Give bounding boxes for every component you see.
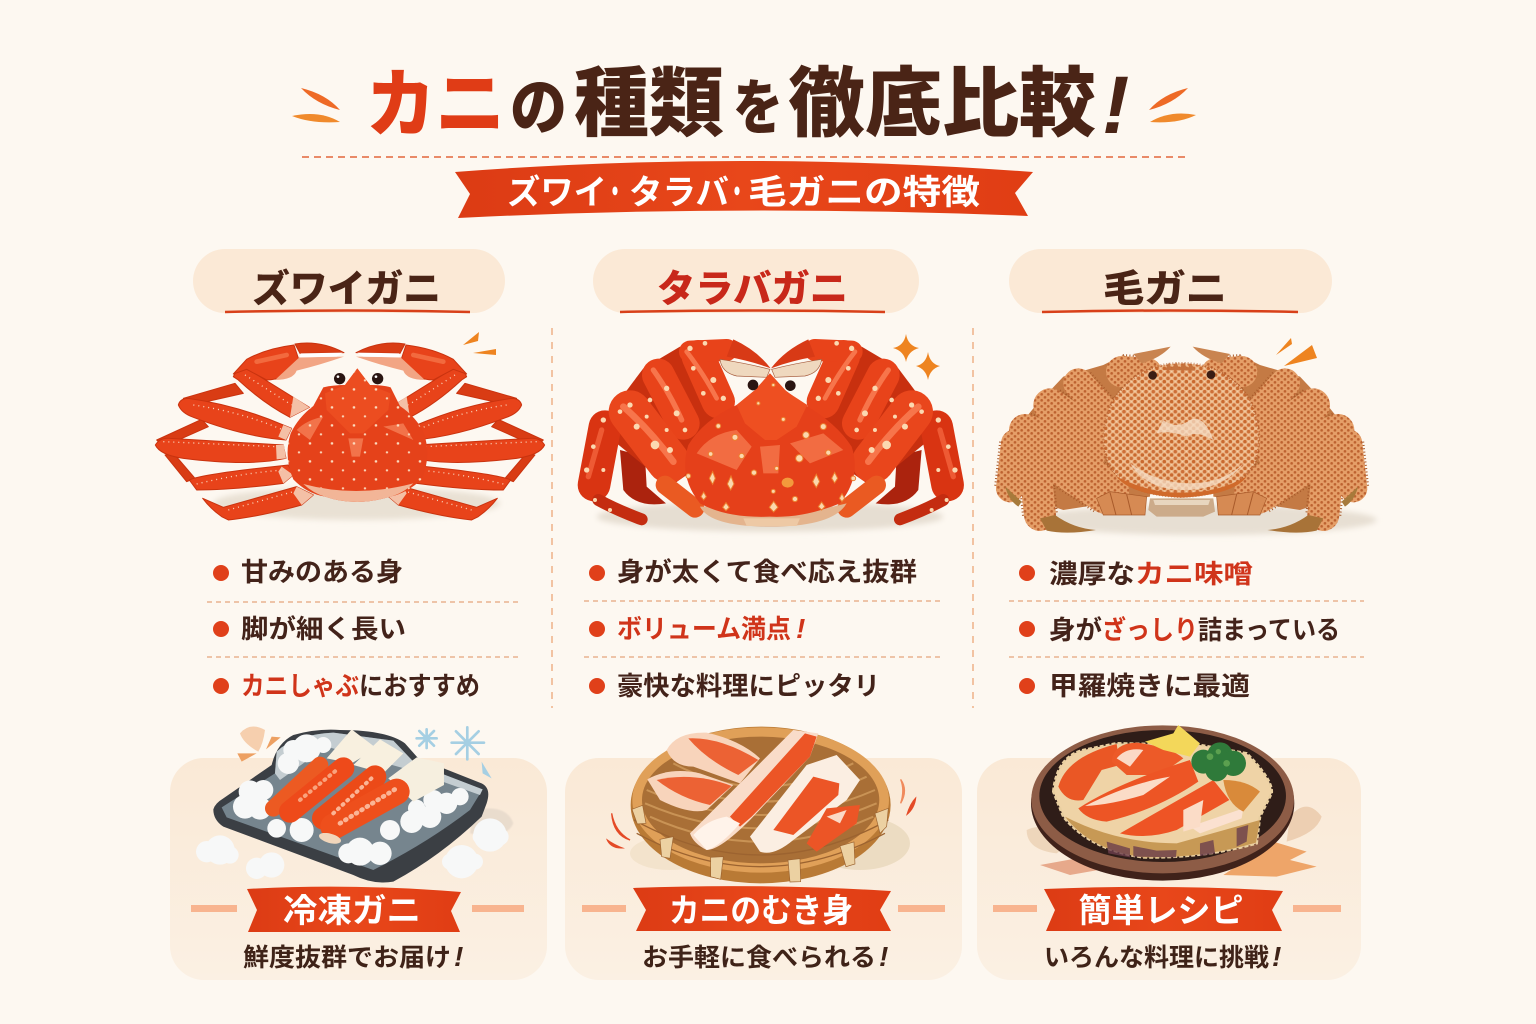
accent marks: horsehair crab <box>1276 338 1317 366</box>
title: 種類 <box>574 62 724 147</box>
subtitle ribbon: ・ <box>727 174 747 212</box>
side dash <box>582 905 626 912</box>
accent sparkles: king crab <box>893 334 940 380</box>
caption: カニのむき身: お手軽に食べられる <box>642 944 876 972</box>
subtitle ribbon: ズワイ <box>507 173 607 212</box>
ribbon: カニのむき身 <box>633 886 891 931</box>
bullet list: ズワイガニ: 甘みのある身 <box>241 557 403 587</box>
panel: カニのむき身 <box>565 727 962 980</box>
title <box>366 60 1129 151</box>
illustration: crab shell gratin plate <box>1027 725 1322 881</box>
title accent right <box>1149 88 1196 122</box>
panel: 簡単レシピ <box>977 725 1361 980</box>
bullet list: ズワイガニ: 脚が細く長い <box>241 614 406 644</box>
subtitle ribbon: 毛ガニの特徴 <box>748 174 980 212</box>
caption: 簡単レシピ: ! <box>1272 941 1281 972</box>
column heading: 毛ガニ <box>1009 249 1332 313</box>
title: の <box>510 74 567 143</box>
bullet list: 毛ガニ: 身が <box>1049 615 1102 645</box>
caption: カニのむき身: ! <box>879 941 888 972</box>
side dash <box>898 905 945 912</box>
panel: 冷凍ガニ <box>170 727 547 980</box>
bullet list: 毛ガニ: 甲羅焼きに最適 <box>1049 671 1250 701</box>
caption: 簡単レシピ: いろんな料理に挑戦 <box>1044 944 1269 972</box>
bullet list: タラバガニ: 身が太くて食べ応え抜群 <box>617 557 917 587</box>
title: 徹底比較 <box>788 62 1096 147</box>
bullet list: ズワイガニ: カニしゃぶ <box>241 671 359 701</box>
column heading: タラバガニ <box>593 249 919 313</box>
ribbon: 簡単レシピ <box>1044 887 1283 931</box>
column heading: タラバガニ: タラバガニ <box>657 269 848 311</box>
caption: 冷凍ガニ: ! <box>454 941 463 972</box>
column heading: 毛ガニ: 毛ガニ <box>1103 269 1227 311</box>
title: ! <box>1102 60 1129 151</box>
ribbon: 冷凍ガニ: 冷凍ガニ <box>283 892 421 929</box>
caption: 冷凍ガニ: 鮮度抜群でお届け <box>243 944 451 972</box>
side dash <box>191 905 237 912</box>
bullet list: 毛ガニ <box>1009 559 1364 701</box>
bullet list: タラバガニ: ボリューム満点 <box>617 614 791 644</box>
bullet list: タラバガニ: 豪快な料理にピッタリ <box>617 671 880 701</box>
illustration: snow crab <box>155 343 545 520</box>
subtitle ribbon <box>455 161 1033 218</box>
ribbon: 簡単レシピ: 簡単レシピ <box>1078 892 1244 929</box>
column heading: ズワイガニ <box>193 249 505 313</box>
illustration: bamboo plate of crab meat <box>606 727 916 883</box>
ribbon: 冷凍ガニ <box>247 887 461 932</box>
side dash <box>1293 905 1341 912</box>
illustration: frozen crab tray <box>196 727 513 882</box>
side dash <box>993 905 1037 912</box>
subtitle ribbon: ・ <box>605 174 625 212</box>
title: を <box>733 75 783 142</box>
illustration: king crab <box>584 339 958 532</box>
bullet list: 毛ガニ: カニ味噌 <box>1135 559 1253 589</box>
ribbon: カニのむき身: カニのむき身 <box>669 892 853 929</box>
bullet list: タラバガニ <box>584 557 941 701</box>
column heading: ズワイガニ: ズワイガニ <box>252 268 441 311</box>
title: カニ <box>366 63 505 146</box>
accent marks: snow crab <box>463 332 496 355</box>
bullet list: タラバガニ: ! <box>796 613 805 644</box>
bullet list: 毛ガニ: 詰まっている <box>1198 615 1340 645</box>
side dash <box>472 905 524 912</box>
bullet list: 毛ガニ: ざっしり <box>1102 615 1198 645</box>
bullet list: 毛ガニ: 濃厚な <box>1049 559 1135 589</box>
subtitle ribbon: タラバ <box>629 174 729 212</box>
bullet list: ズワイガニ <box>207 557 522 701</box>
illustration: horsehair crab <box>1005 347 1377 535</box>
bullet list: ズワイガニ: におすすめ <box>359 671 480 701</box>
title accent left <box>292 88 340 122</box>
